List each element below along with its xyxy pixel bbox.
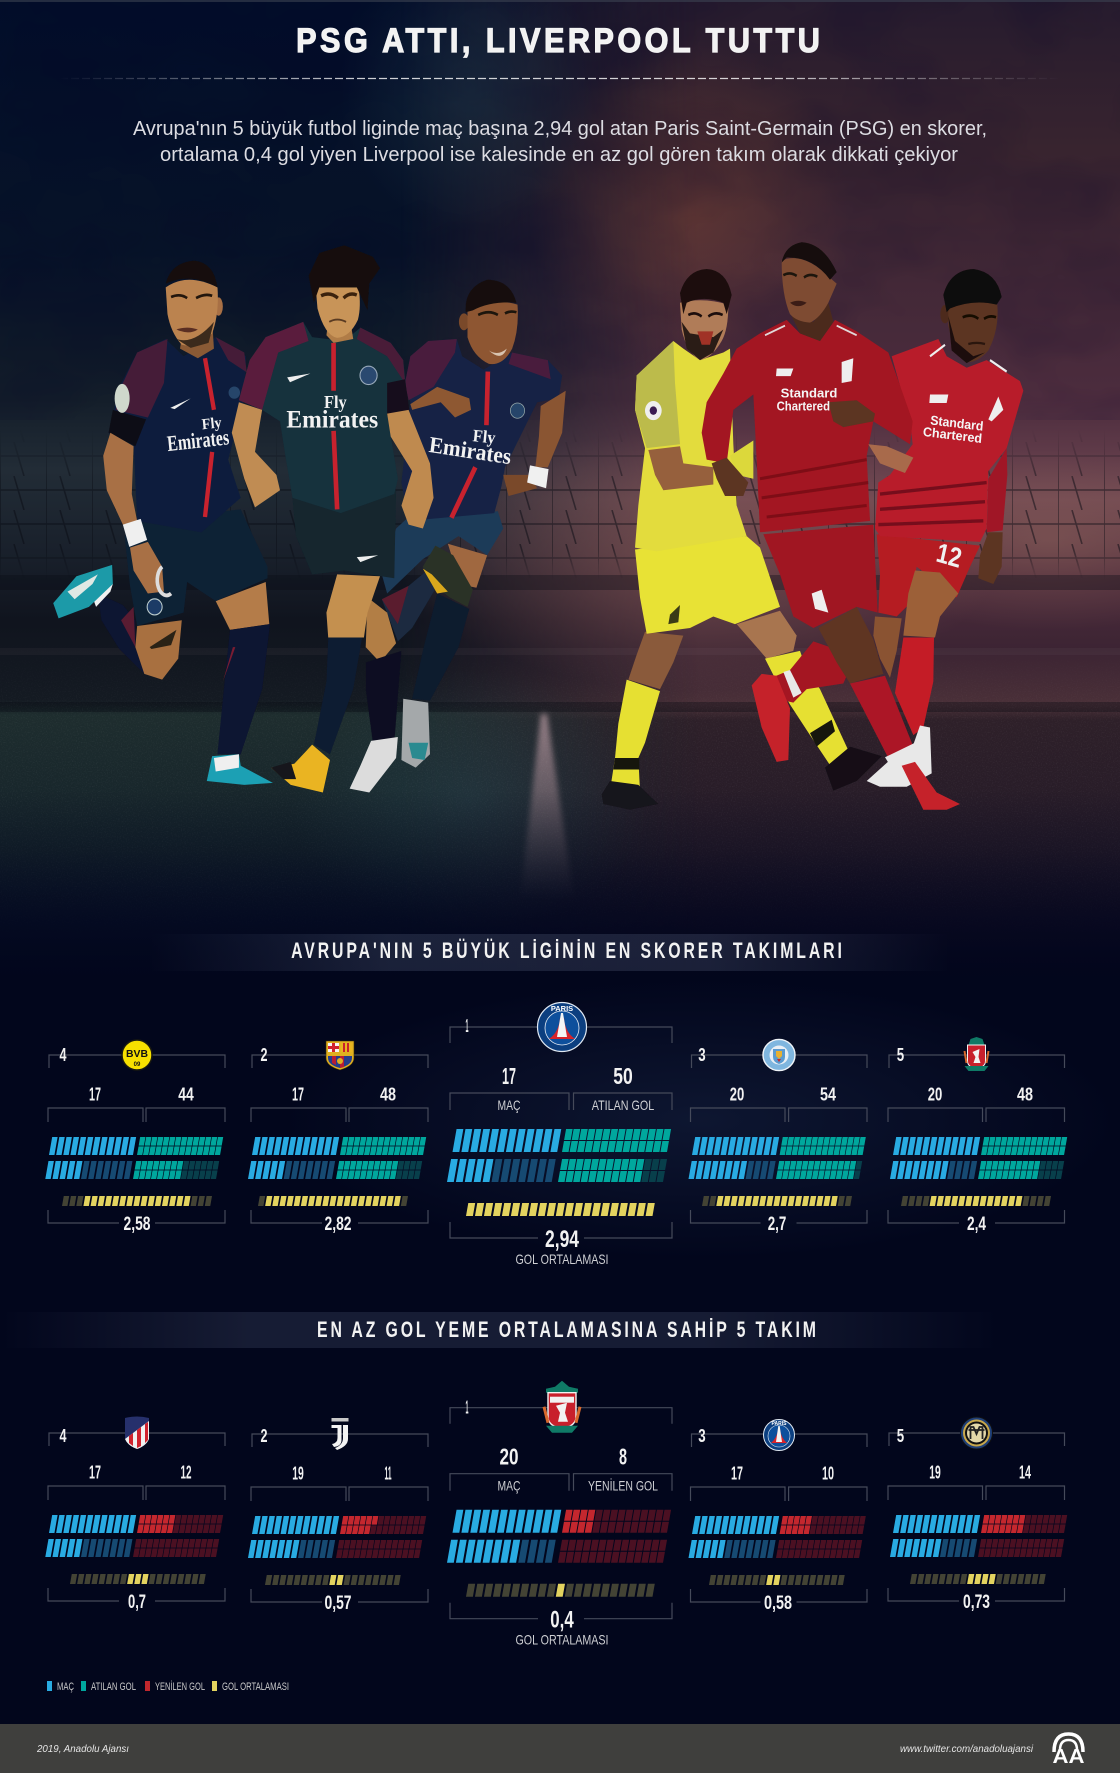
goal average value: 2,4	[967, 1213, 986, 1235]
goal average value: 2,58	[124, 1213, 151, 1235]
heading band: top scorers: AVRUPA'NIN 5 BÜYÜK LİGİNİN EN SKORER TAKIMLARI	[291, 940, 842, 964]
legend: MAÇ	[57, 1681, 74, 1693]
goal average value: 2,82	[324, 1213, 352, 1235]
goals value: 8	[619, 1444, 627, 1470]
team card: Liverpool, fewest conceded: 1	[466, 1397, 468, 1418]
rank: 5	[897, 1044, 904, 1065]
goal average value: 0,4	[550, 1607, 574, 1634]
goals value: 10	[822, 1463, 834, 1484]
matches value: 17	[89, 1084, 101, 1105]
goal average value: 0,73	[963, 1591, 990, 1613]
logo: Manchester City	[763, 1039, 795, 1071]
team card: Atletico Madrid	[47, 1416, 225, 1613]
player: Van Dijk	[702, 242, 960, 810]
goal average bar	[71, 1574, 205, 1584]
logo: Anadolu Agency	[1052, 1734, 1084, 1768]
player: Alisson	[602, 269, 882, 810]
label: goal average: GOL ORTALAMASI	[516, 1251, 608, 1267]
title divider	[60, 78, 1060, 80]
goals value: 48	[380, 1084, 396, 1105]
matches value: 20	[500, 1444, 518, 1470]
goal average value: 0,57	[324, 1592, 352, 1614]
label: matches: MAÇ	[498, 1097, 520, 1113]
team card: Liverpool, scorers	[888, 1037, 1066, 1235]
logo: BVB	[122, 1040, 152, 1070]
player: Neymar: Fly	[201, 415, 223, 433]
matches value: 17	[292, 1084, 304, 1105]
player: Gomez: Chartered	[922, 424, 983, 446]
team card: PSG, top scorer: 1	[466, 1015, 468, 1036]
logo: Liverpool	[964, 1037, 988, 1071]
twitter url: www.twitter.com/anadoluajansi	[900, 1743, 1034, 1755]
goal average bar	[467, 1203, 654, 1216]
rank: 5	[897, 1425, 904, 1446]
segment bars	[892, 1519, 1066, 1553]
player: Cavani: Emirates	[286, 406, 378, 434]
legend	[47, 1680, 289, 1693]
title: PSG ATTI, LIVERPOOL TUTTU	[296, 22, 820, 59]
intro text: ortalama 0,4 gol yiyen Liverpool ise kalesinde en az gol gören takım olarak dikkati çekiyor	[160, 144, 958, 166]
heading band: fewest goals conceded: EN AZ GOL YEME ORTALAMASINA SAHİP 5 TAKIM	[317, 1319, 816, 1343]
team card: Juventus: 11	[384, 1463, 392, 1484]
matches value: 19	[929, 1462, 941, 1483]
logo: PSG	[538, 1002, 586, 1052]
goals value: 12	[180, 1462, 192, 1483]
players: PSG trio	[53, 245, 566, 792]
segment bars	[250, 1520, 425, 1554]
player hand: Gomez	[868, 444, 913, 473]
player: Gomez: Standard	[930, 413, 984, 434]
logo: BVB: 09	[134, 1062, 141, 1068]
segment bars	[449, 1134, 670, 1176]
goal average bar	[63, 1196, 211, 1206]
logo: Inter	[960, 1417, 992, 1449]
logo: Barcelona	[326, 1041, 354, 1070]
background: stadium night scene	[0, 0, 1120, 1206]
label: goals conceded: YENİLEN GOL	[588, 1477, 658, 1494]
rank: 2	[260, 1425, 268, 1446]
heading band: top scorers	[150, 934, 950, 971]
player: Van Dijk: Chartered	[777, 399, 830, 414]
label: goal average: GOL ORTALAMASI	[516, 1632, 608, 1648]
rank: 4	[60, 1044, 67, 1065]
players: Liverpool trio	[602, 242, 1023, 810]
player: Mbappe	[382, 280, 566, 768]
label: goals scored: ATILAN GOL	[592, 1097, 654, 1113]
rank: 4	[60, 1425, 67, 1446]
rank: 2	[260, 1044, 268, 1065]
logo: Anadolu Agency: AA	[1052, 1746, 1084, 1768]
legend: ATILAN GOL	[91, 1681, 136, 1693]
logo: Juventus	[332, 1418, 348, 1450]
player: Cavani	[232, 245, 434, 792]
team card: Juventus	[250, 1418, 428, 1614]
team card: Inter	[888, 1417, 1066, 1613]
segment bars	[250, 1141, 425, 1175]
goal average value: 2,7	[768, 1213, 786, 1235]
player: Neymar: Emirates	[166, 425, 230, 456]
team card: Barcelona	[250, 1041, 428, 1235]
goals value: 14	[1019, 1462, 1031, 1483]
goal average bar	[259, 1196, 407, 1206]
logo: PSG small	[764, 1420, 794, 1450]
segment bars	[47, 1141, 222, 1175]
logo: BVB: BVB	[126, 1048, 148, 1060]
footer	[0, 1724, 1120, 1773]
matches value: 17	[89, 1462, 101, 1483]
goal average bar	[703, 1196, 851, 1206]
team card: PSG, top scorer	[449, 1002, 672, 1267]
team card: Liverpool, fewest conceded	[449, 1381, 672, 1648]
segment bars	[47, 1519, 222, 1553]
player: Gomez	[867, 269, 1023, 787]
goal average value: 2,94	[545, 1226, 579, 1253]
logo: PSG: PARIS	[551, 1004, 573, 1013]
team card: Manchester City	[690, 1039, 867, 1235]
legend: YENİLEN GOL	[155, 1680, 205, 1693]
goal average bar	[902, 1196, 1050, 1206]
rank: 3	[698, 1425, 706, 1446]
matches value: 17	[502, 1063, 516, 1089]
player: Mbappe: Emirates	[428, 431, 513, 469]
intro text	[133, 118, 987, 166]
goal average value: 0,58	[764, 1592, 792, 1614]
matches value: 20	[730, 1084, 744, 1105]
legend: GOL ORTALAMASI	[222, 1681, 289, 1693]
player: Gomez: 12	[934, 538, 964, 574]
goal average bar	[710, 1575, 844, 1585]
goals value: 44	[178, 1084, 194, 1105]
heading band: fewest goals conceded	[0, 1312, 1000, 1348]
goals value: 54	[820, 1084, 837, 1105]
logo: Atletico Madrid	[125, 1416, 149, 1449]
segment bars	[892, 1141, 1066, 1175]
team card: PSG, fewest conceded	[690, 1420, 867, 1614]
player: Neymar	[53, 261, 273, 785]
segment bars	[449, 1515, 670, 1557]
matches value: 20	[928, 1084, 942, 1105]
segment bars	[690, 1520, 865, 1554]
logo: PSG small: PARIS	[772, 1421, 787, 1427]
goal average value: 0,7	[128, 1591, 146, 1613]
player: Mbappe: Fly	[472, 426, 497, 448]
team card: Borussia Dortmund	[47, 1040, 225, 1235]
logo: Liverpool large	[544, 1381, 580, 1433]
intro text: Avrupa'nın 5 büyük futbol liginde maç başına 2,94 gol atan Paris Saint-Germain (PSG) en skorer,	[133, 118, 987, 140]
segment bars	[690, 1141, 865, 1175]
rank: 3	[698, 1044, 706, 1065]
goals value: 48	[1017, 1084, 1033, 1105]
credit: 2019, Anadolu Ajansı	[36, 1743, 129, 1755]
matches value: 19	[292, 1463, 304, 1484]
player: Van Dijk: Standard	[781, 386, 837, 401]
player: Cavani: Fly	[324, 392, 347, 412]
goal average bar	[266, 1575, 400, 1585]
matches value: 17	[731, 1463, 743, 1484]
goal average bar	[467, 1584, 654, 1597]
goals value: 50	[613, 1063, 633, 1089]
goal average bar	[911, 1574, 1045, 1584]
label: matches: MAÇ	[498, 1478, 520, 1494]
